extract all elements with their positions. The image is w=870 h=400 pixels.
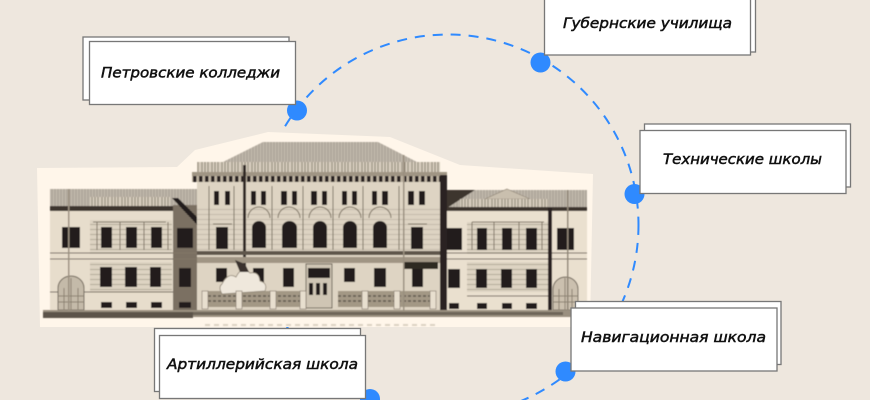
dot: Навигационная школа: [556, 362, 576, 382]
dot: Артиллерийская школа: [360, 389, 380, 400]
building illustration: [37, 132, 593, 327]
ground line: [43, 310, 588, 317]
card: Технические школы: [640, 124, 850, 194]
card: Артиллерийская школа: Артиллерийская школа: [166, 357, 358, 373]
shrubs and fence: [208, 291, 303, 307]
left wing: [50, 189, 202, 314]
entrance: [306, 264, 332, 308]
dot: Технические школы: [624, 184, 644, 204]
card: Артиллерийская школа: [154, 328, 366, 398]
card: Технические школы: Технические школы: [663, 152, 822, 168]
dot: Губернские училища: [530, 52, 550, 72]
card: Губернские училища: [544, 0, 756, 55]
card: Губернские училища: Губернские училища: [563, 16, 732, 32]
card: Петровские колледжи: [83, 37, 296, 104]
central block: [192, 142, 447, 310]
card: Навигационная школа: [571, 302, 781, 371]
paper cutout: [37, 132, 593, 327]
card: Петровские колледжи: Петровские колледжи: [101, 66, 280, 82]
caption marks: [205, 324, 435, 326]
card: Навигационная школа: Навигационная школа: [581, 330, 766, 346]
dashed circle timeline: [258, 34, 638, 400]
dot: Петровские колледжи: [287, 100, 307, 120]
right wing: [440, 175, 587, 315]
